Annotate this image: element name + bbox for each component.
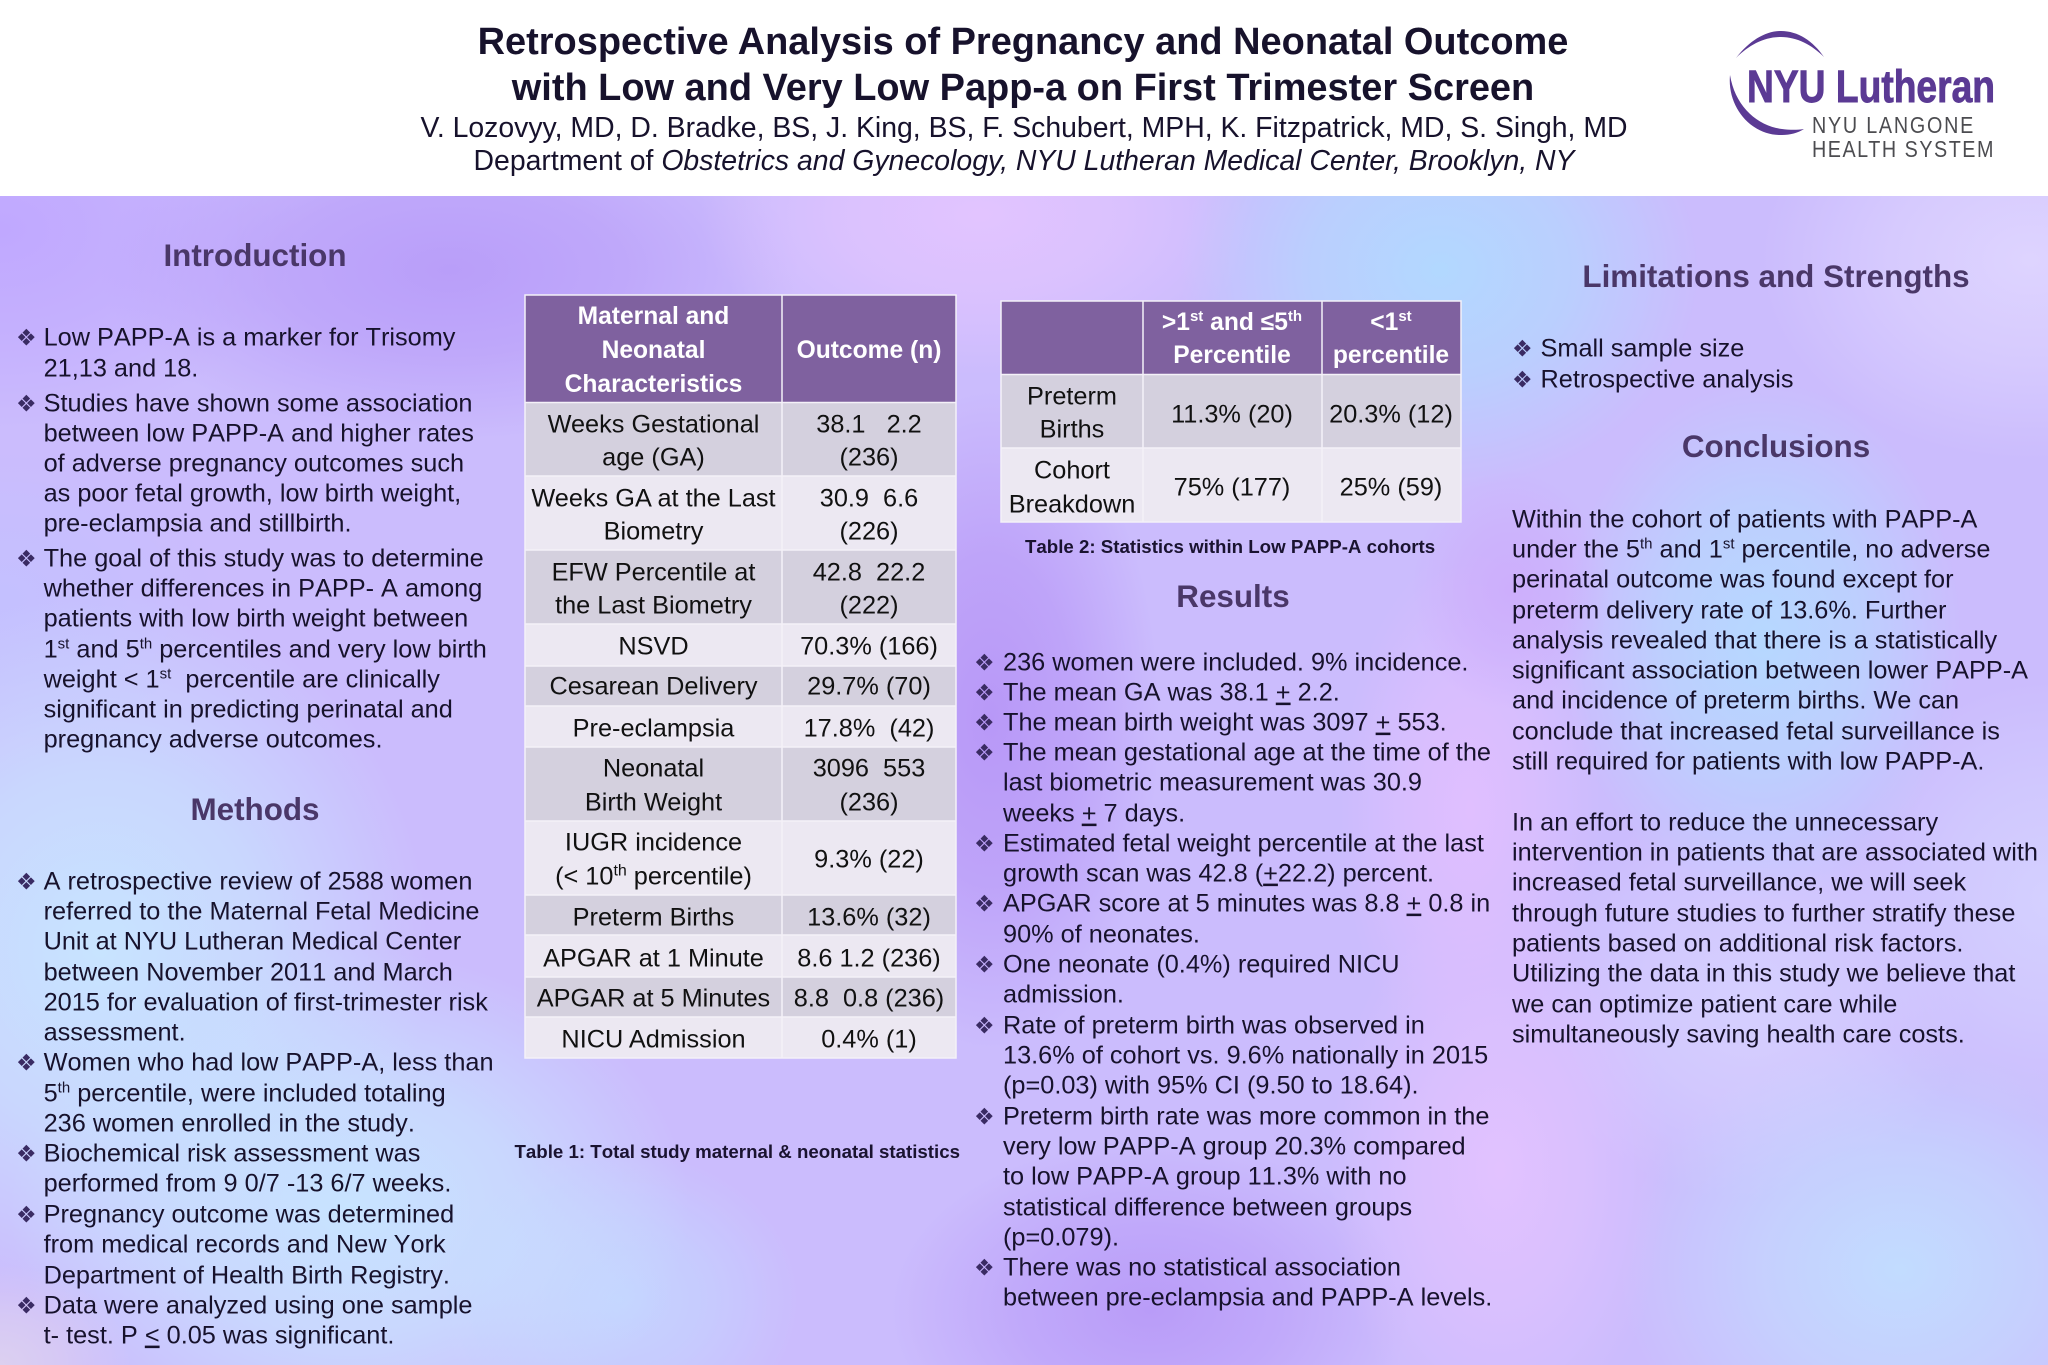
- bullet list: methods: ❖: [16, 1051, 37, 1077]
- bullet list: introduction: weight < 1: [44, 666, 160, 694]
- table 1 header: Neonatal: [602, 337, 705, 364]
- bullet list: methods: percentile, were included totaling: [70, 1080, 446, 1108]
- bullet list: results: There was no statistical association: [1003, 1254, 1401, 1282]
- header band: [0, 0, 2048, 196]
- table 1 rows: EFW Percentile at: [552, 559, 755, 587]
- bullet list: methods: Department of Health Birth Registry.: [44, 1262, 450, 1290]
- heading: results: Results: [1176, 579, 1290, 614]
- table 1 rows: (222): [839, 592, 899, 620]
- bullet list: methods: from medical records and New York: [44, 1231, 446, 1259]
- table 1: maternal and neonatal characteristics: [525, 295, 956, 1058]
- bullet list: results: 13.6% of cohort vs. 9.6% nationally in 2015: [1003, 1042, 1488, 1070]
- logo system name: NYU LANGONE: [1812, 111, 1973, 138]
- bullet list: introduction: pre-eclampsia and stillbirth.: [44, 510, 352, 538]
- bullet list: results: Rate of preterm birth was observed in: [1003, 1012, 1425, 1040]
- bullet list: methods: between November 2011 and March: [44, 959, 453, 987]
- bullet list: results: weeks + 7 days.: [1002, 800, 1185, 828]
- bullet list: methods: 5: [44, 1080, 58, 1108]
- bullet list: results: The mean gestational age at the time of the: [1003, 739, 1491, 767]
- paragraph: conclusions: percentile, no adverse: [1735, 536, 1990, 564]
- bullet list: introduction: significant in predicting perinatal and: [44, 696, 453, 724]
- table 1 rows: 38.1 2.2: [816, 411, 922, 439]
- bullet list: results: very low PAPP-A group 20.3% compared: [1003, 1133, 1466, 1161]
- paragraph: conclusions: perinatal outcome was found except for: [1512, 566, 1954, 594]
- heading: methods: Methods: [190, 792, 320, 827]
- bullet list: results: statistical difference between groups: [1003, 1194, 1412, 1222]
- paragraph: conclusions: and 1: [1653, 536, 1723, 564]
- table 2 rows: 75% (177): [1174, 474, 1290, 502]
- table 1 rows: NSVD: [618, 633, 689, 661]
- bullet list: methods: Biochemical risk assessment was: [44, 1140, 420, 1168]
- table 2 rows: Preterm: [1027, 383, 1117, 411]
- table 1 rows: 70.3% (166): [800, 633, 938, 661]
- bullet list: introduction: of adverse pregnancy outcomes such: [44, 450, 464, 478]
- paragraph: future directions: we can optimize patient care while: [1511, 991, 1897, 1019]
- bullet list: results: [974, 649, 1492, 1312]
- table 1 rows: Birth Weight: [585, 789, 722, 817]
- title block: [420, 21, 1628, 177]
- table 2 rows: 11.3% (20): [1171, 401, 1293, 429]
- bullet list: results: ❖: [974, 832, 995, 858]
- table 1 rows: 3096 553: [813, 755, 925, 783]
- table 1 rows: 8.8 0.8 (236): [794, 985, 944, 1013]
- bullet list: methods: Women who had low PAPP-A, less than: [44, 1049, 494, 1077]
- table 2 rows: Breakdown: [1009, 491, 1135, 519]
- bullet list: results: ❖: [974, 711, 995, 737]
- panel: results: [974, 579, 1492, 1312]
- table 1 rows: Weeks GA at the Last: [531, 485, 776, 513]
- table 2 rows: 25% (59): [1340, 474, 1442, 502]
- bullet list: methods: Pregnancy outcome was determined: [44, 1201, 454, 1229]
- table 1 rows: IUGR incidence: [565, 829, 742, 857]
- bullet list: results: ❖: [974, 681, 995, 707]
- panel: introduction: [16, 238, 487, 754]
- bullet list: results: growth scan was 42.8 (+22.2) percent.: [1003, 860, 1434, 888]
- table 2 rows: Births: [1040, 416, 1104, 444]
- title: [478, 21, 1568, 109]
- bullet list: results: (p=0.03) with 95% CI (9.50 to 18.64).: [1003, 1072, 1419, 1100]
- bullet list: introduction: st: [58, 636, 70, 653]
- table 1 rows: (236): [839, 789, 899, 817]
- authors: V. Lozovyy, MD, D. Bradke, BS, J. King, BS, F. Schubert, MPH, K. Fitzpatrick, MD, S. Singh, MD: [420, 112, 1628, 144]
- bullet list: results: ❖: [974, 953, 995, 979]
- table 1 rows: 13.6% (32): [807, 904, 931, 932]
- bullet list: methods: ❖: [16, 1142, 37, 1168]
- table 2 rows: [1001, 301, 1461, 522]
- bullet list: results: 90% of neonates.: [1003, 921, 1200, 949]
- table 2 header: [1001, 301, 1461, 374]
- title: Retrospective Analysis of Pregnancy and Neonatal Outcome: [478, 21, 1568, 63]
- paragraph: future directions: In an effort to reduce the unnecessary: [1512, 809, 1938, 837]
- table 1 header: Outcome (n): [797, 337, 941, 364]
- paragraph: future directions: patients based on additional risk factors.: [1512, 930, 1963, 958]
- paragraph: conclusions: under the 5: [1512, 536, 1640, 564]
- bullet list: introduction: 1: [44, 636, 58, 664]
- bullet list: results: admission.: [1003, 981, 1124, 1009]
- table 1 rows: 0.4% (1): [821, 1026, 917, 1054]
- bullet list: introduction: ❖: [16, 326, 37, 352]
- paragraph: future directions: through future studies to further stratify these: [1512, 900, 2015, 928]
- table 1 rows: 8.6 1.2 (236): [797, 945, 941, 973]
- bullet list: introduction: and 5: [69, 636, 140, 664]
- bullet list: results: The mean GA was 38.1 + 2.2.: [1003, 679, 1340, 707]
- bullet list: introduction: percentiles and very low birth: [152, 636, 487, 664]
- bullet list: introduction: ❖: [16, 547, 37, 573]
- bullet list: introduction: between low PAPP-A and higher rates: [44, 420, 474, 448]
- table 2 header: >1: [1162, 309, 1190, 336]
- bullet list: results: ❖: [974, 1105, 995, 1131]
- heading: conclusions: Conclusions: [1682, 429, 1870, 464]
- table 1 rows: (< 10: [555, 863, 613, 891]
- bullet list: limitations: ❖: [1512, 337, 1533, 363]
- table 1 rows: Neonatal: [603, 755, 704, 783]
- bullet list: introduction: patients with low birth weight between: [44, 605, 468, 633]
- bullet list: methods: performed from 9 0/7 -13 6/7 weeks.: [44, 1170, 451, 1198]
- table 1 rows: Preterm Births: [573, 904, 734, 932]
- bullet list: results: (p=0.079).: [1003, 1224, 1119, 1252]
- bullet list: methods: 236 women enrolled in the study.: [44, 1110, 415, 1138]
- table 2 header: th: [1288, 308, 1302, 325]
- title: with Low and Very Low Papp-a on First Trimester Screen: [511, 67, 1534, 109]
- bullet list: introduction: th: [140, 636, 152, 653]
- paragraph: future directions: Utilizing the data in this study we believe that: [1512, 960, 2015, 988]
- paragraph: conclusions: analysis revealed that there is a statistically: [1512, 627, 1997, 655]
- table 2 header: st: [1398, 308, 1412, 325]
- bullet list: results: ❖: [974, 1256, 995, 1282]
- bullet list: results: One neonate (0.4%) required NICU: [1003, 951, 1400, 979]
- bullet list: results: to low PAPP-A group 11.3% with no: [1003, 1163, 1407, 1191]
- table 1 rows: Weeks Gestational: [548, 411, 759, 439]
- table 2 rows: 20.3% (12): [1329, 401, 1453, 429]
- table 1 rows: [525, 295, 956, 1058]
- bullet list: methods: ❖: [16, 870, 37, 896]
- bullet list: methods: th: [58, 1080, 70, 1097]
- bullet list: methods: assessment.: [44, 1019, 186, 1047]
- bullet list: methods: 2015 for evaluation of first-trimester risk: [44, 989, 488, 1017]
- bullet list: results: 236 women were included. 9% incidence.: [1003, 649, 1468, 677]
- panel: limitations and strengths: [1512, 259, 1970, 394]
- bullet list: methods: ❖: [16, 1294, 37, 1320]
- bullet list: methods: [16, 868, 494, 1350]
- paragraph: conclusions: and incidence of preterm births. We can: [1512, 687, 1959, 715]
- bullet list: introduction: percentile are clinically: [171, 666, 440, 694]
- bullet list: results: Estimated fetal weight percentile at the last: [1003, 830, 1484, 858]
- paragraph: future directions: intervention in patients that are associated with: [1512, 839, 2038, 867]
- table 2 header: percentile: [1333, 342, 1449, 369]
- bullet list: results: ❖: [974, 1014, 995, 1040]
- logo arc top: [1736, 31, 1824, 58]
- bullet list: introduction: 21,13 and 18.: [44, 355, 198, 383]
- bullet list: limitations: Small sample size: [1540, 335, 1744, 363]
- bullet list: introduction: [16, 324, 487, 754]
- paragraph: conclusions: [1512, 506, 2028, 776]
- bullet list: limitations: ❖: [1512, 368, 1533, 394]
- table 1 rows: age (GA): [602, 444, 705, 472]
- bullet list: results: ❖: [974, 741, 995, 767]
- bullet list: results: ❖: [974, 892, 995, 918]
- table 1 header: Characteristics: [565, 371, 742, 398]
- table 1 rows: th: [613, 863, 627, 880]
- table 1 header: [525, 295, 956, 402]
- logo wordmark: NYU Lutheran: [1747, 61, 1995, 112]
- table 1 rows: (236): [839, 444, 899, 472]
- paragraph: future directions: simultaneously saving health care costs.: [1512, 1021, 1965, 1049]
- paragraph: conclusions: th: [1640, 536, 1653, 553]
- logo: NYU Lutheran: [1730, 31, 1995, 162]
- table 1 rows: Biometry: [604, 518, 704, 546]
- bullet list: methods: ❖: [16, 1203, 37, 1229]
- table 1 rows: percentile): [627, 863, 752, 891]
- paragraph: future directions: [1511, 809, 2038, 1049]
- table 1 rows: NICU Admission: [561, 1026, 746, 1054]
- bullet list: methods: A retrospective review of 2588 women: [44, 868, 472, 896]
- table 2 caption: Table 2: Statistics within Low PAPP-A cohorts: [1025, 536, 1435, 557]
- table 2 header: and ≤5: [1203, 309, 1288, 336]
- bullet list: introduction: ❖: [16, 392, 37, 418]
- table 1 rows: Cesarean Delivery: [549, 673, 758, 701]
- table 2 header: Percentile: [1173, 342, 1291, 369]
- bullet list: results: ❖: [974, 651, 995, 677]
- table 1 rows: APGAR at 5 Minutes: [537, 985, 770, 1013]
- table 1 header: Maternal and: [578, 303, 729, 330]
- table 1 rows: the Last Biometry: [555, 592, 752, 620]
- heading: limitations and strengths: Limitations and Strengths: [1582, 259, 1970, 294]
- bullet list: results: last biometric measurement was 30.9: [1003, 769, 1422, 797]
- bullet list: methods: Data were analyzed using one sample: [44, 1292, 473, 1320]
- heading: introduction: Introduction: [163, 238, 347, 273]
- bullet list: results: APGAR score at 5 minutes was 8.8 + 0.8 in: [1003, 890, 1490, 918]
- table 2 header: st: [1190, 308, 1203, 325]
- bullet list: methods: referred to the Maternal Fetal Medicine: [44, 898, 479, 926]
- bullet list: introduction: Studies have shown some association: [44, 390, 472, 418]
- table 1 caption: Table 1: Total study maternal & neonatal statistics: [514, 1141, 960, 1162]
- bullet list: limitations: [1512, 335, 1794, 394]
- paragraph: conclusions: still required for patients with low PAPP-A.: [1512, 748, 1984, 776]
- table 1 rows: 30.9 6.6: [820, 485, 918, 513]
- table 1 rows: APGAR at 1 Minute: [543, 945, 764, 973]
- bullet list: introduction: as poor fetal growth, low birth weight,: [44, 480, 461, 508]
- affiliation: Department of Obstetrics and Gynecology, NYU Lutheran Medical Center, Brooklyn, NY: [474, 145, 1577, 177]
- table 1 rows: (226): [839, 518, 899, 546]
- paragraph: conclusions: preterm delivery rate of 13.6%. Further: [1512, 597, 1946, 625]
- bullet list: methods: t- test. P < 0.05 was significant.: [44, 1322, 394, 1350]
- bullet list: introduction: st: [160, 666, 172, 683]
- paragraph: conclusions: Within the cohort of patients with PAPP-A: [1512, 506, 1978, 534]
- paragraph: conclusions: significant association between lower PAPP-A: [1512, 657, 2028, 685]
- bullet list: limitations: Retrospective analysis: [1540, 366, 1794, 394]
- panel: conclusions: [1511, 429, 2038, 1049]
- bullet list: introduction: Low PAPP-A is a marker for Trisomy: [44, 324, 456, 352]
- bullet list: introduction: The goal of this study was to determine: [44, 545, 484, 573]
- table 2: statistics within low PAPP-A cohorts: [1001, 301, 1461, 522]
- bullet list: results: Preterm birth rate was more common in the: [1003, 1103, 1489, 1131]
- logo system name second line: HEALTH SYSTEM: [1812, 135, 1993, 162]
- table 1 rows: 9.3% (22): [814, 846, 924, 874]
- table 2 rows: Cohort: [1034, 457, 1110, 485]
- bullet list: results: The mean birth weight was 3097 + 553.: [1003, 709, 1447, 737]
- panel: methods: [16, 792, 494, 1350]
- paragraph: conclusions: st: [1723, 536, 1735, 553]
- paragraph: conclusions: conclude that increased fetal surveillance is: [1512, 718, 2000, 746]
- table 2 header: <1: [1370, 309, 1398, 336]
- bullet list: introduction: pregnancy adverse outcomes.: [44, 726, 382, 754]
- bullet list: results: between pre-eclampsia and PAPP-A levels.: [1003, 1284, 1492, 1312]
- bullet list: methods: Unit at NYU Lutheran Medical Center: [44, 928, 461, 956]
- bullet list: introduction: whether differences in PAPP- A among: [43, 575, 482, 603]
- table 1 rows: Pre-eclampsia: [573, 715, 735, 743]
- table 1 rows: 29.7% (70): [807, 673, 931, 701]
- table 1 rows: 17.8% (42): [804, 715, 934, 743]
- paragraph: future directions: increased fetal surveillance, we will seek: [1512, 869, 1966, 897]
- logo arc bottom: [1730, 75, 1804, 135]
- table 1 rows: 42.8 22.2: [813, 559, 925, 587]
